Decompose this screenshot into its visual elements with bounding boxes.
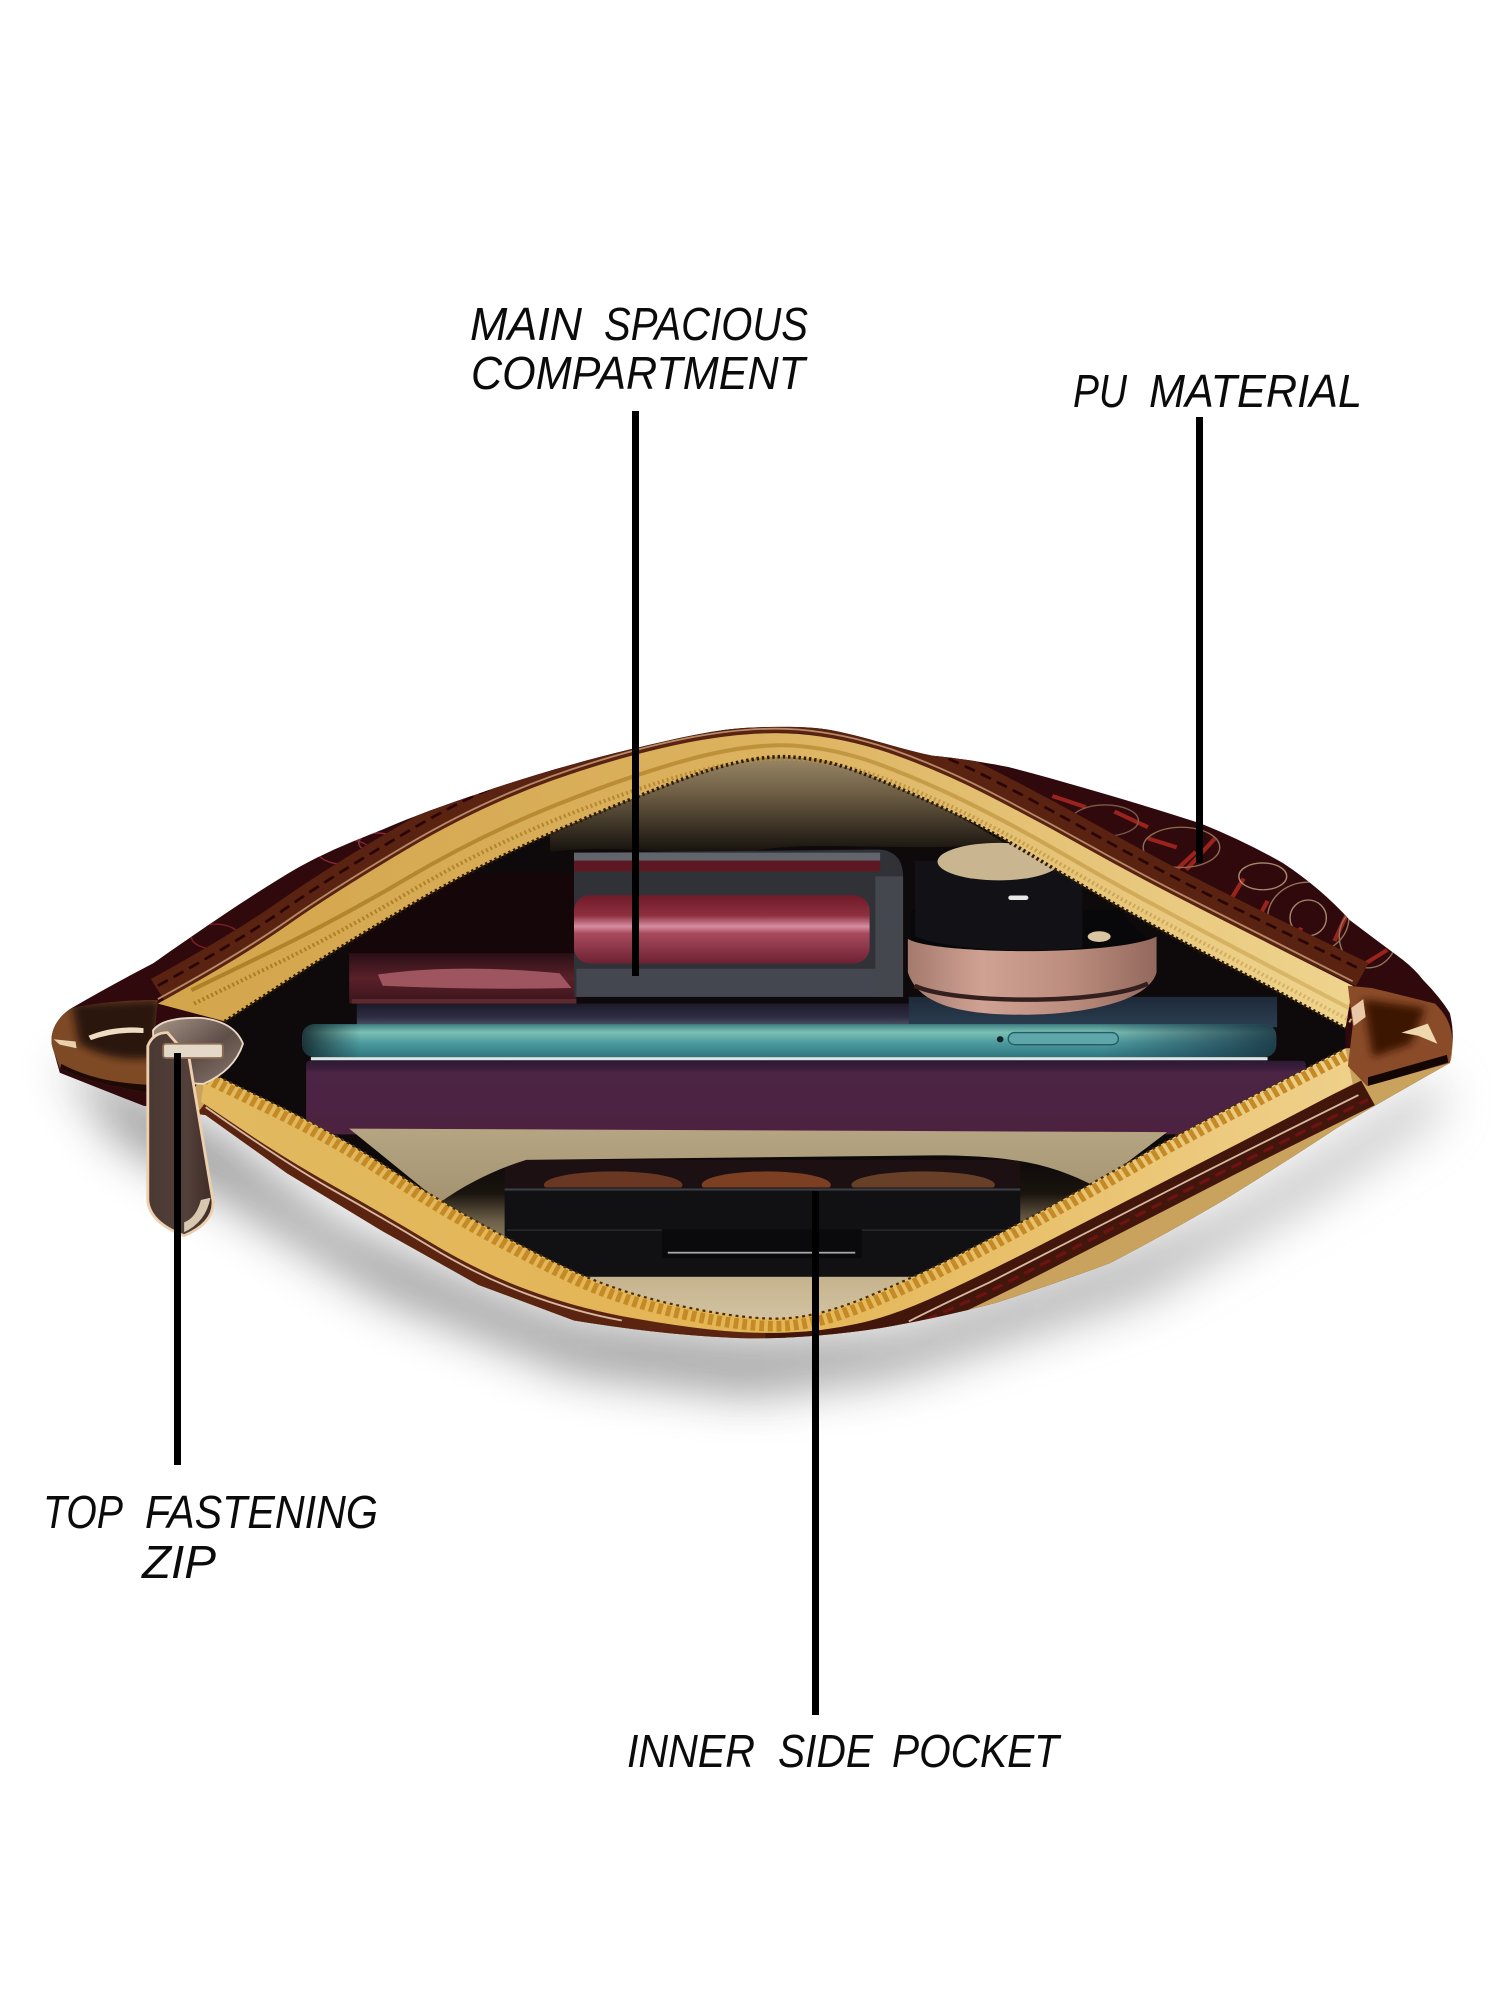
lip gloss, clear case xyxy=(574,850,903,997)
top zip centre seam xyxy=(191,745,1349,1008)
pigment mounds xyxy=(544,1171,683,1198)
leader line: top zip xyxy=(174,1053,181,1465)
tab dark zone xyxy=(1363,999,1425,1057)
label: inner side pocket: POCKET xyxy=(892,1725,1062,1777)
edge strip stitches, top xyxy=(157,756,1358,987)
tan lower panel xyxy=(191,1048,1464,1347)
pocket lining xyxy=(430,1160,1110,1329)
label: top fastening zip: ZIP xyxy=(141,1536,216,1588)
reflection xyxy=(378,969,572,989)
glossy edge strip, bottom right xyxy=(765,1093,1368,1345)
pull tab xyxy=(148,1033,213,1236)
tab left shine xyxy=(54,1039,77,1048)
side button xyxy=(1008,1033,1118,1045)
label: top fastening zip: FASTENING xyxy=(145,1486,378,1538)
pocket lip xyxy=(349,1129,1167,1202)
jar back xyxy=(911,910,1153,968)
palette lid xyxy=(505,1160,1020,1188)
clear body xyxy=(574,850,903,997)
clasp notch xyxy=(662,1229,862,1258)
body top edge xyxy=(505,1188,1020,1191)
back lining xyxy=(550,756,1004,852)
label: main spacious compartment: COMPARTMENT xyxy=(471,347,808,399)
base ring xyxy=(915,983,1148,1000)
powder flake xyxy=(1088,931,1111,942)
powder base xyxy=(908,937,1157,1015)
teal frame xyxy=(302,1024,1276,1057)
lid label xyxy=(938,843,1060,880)
phone xyxy=(302,997,1277,1060)
left rings xyxy=(318,839,371,864)
left bronze end tab xyxy=(48,997,163,1097)
lid highlight xyxy=(1008,896,1028,900)
camera dot xyxy=(997,1036,1004,1042)
label: PU material: PU xyxy=(1073,365,1128,417)
clasp highlight xyxy=(668,1252,855,1254)
slider head xyxy=(153,1018,243,1084)
tab body xyxy=(48,997,163,1097)
palette body xyxy=(505,1188,1020,1277)
makeup palette xyxy=(505,1160,1020,1277)
label: inner side pocket: INNER xyxy=(627,1725,755,1777)
right bronze end tab xyxy=(1344,981,1459,1091)
back plate right tone xyxy=(909,997,1277,1027)
top zip tape xyxy=(158,733,1353,1028)
bottom zip ribs xyxy=(206,1056,1346,1326)
top strip xyxy=(574,853,880,861)
lip gloss, dark case xyxy=(349,953,576,1004)
tab crease xyxy=(1351,999,1366,1026)
label: main spacious compartment: SPACIOUS xyxy=(604,298,808,350)
label: inner side pocket: SIDE xyxy=(778,1725,874,1777)
tab lower edge xyxy=(1368,1055,1448,1087)
top zip inner dotted row xyxy=(194,759,1352,1021)
tab shine xyxy=(88,1027,143,1040)
phone back plate xyxy=(357,1004,921,1026)
floral print linework xyxy=(191,796,1397,968)
edge strip highlight, bottom xyxy=(206,1095,1358,1321)
beige rings xyxy=(1290,900,1326,936)
top zip teeth xyxy=(225,757,1346,1028)
leader line: PU material xyxy=(1196,417,1203,863)
label: top fastening zip: TOP xyxy=(43,1486,123,1538)
slider ring xyxy=(163,1044,223,1058)
cosmetic jar xyxy=(908,843,1157,1015)
case upper body xyxy=(349,873,576,958)
tab body xyxy=(1344,981,1459,1091)
pouch interior xyxy=(206,745,1346,1327)
printed leather back panel xyxy=(29,713,1473,1347)
glass edge xyxy=(875,876,903,997)
red rays xyxy=(1052,796,1387,968)
glossy edge strip, bottom left xyxy=(201,1108,786,1340)
soft drop shadow xyxy=(62,1057,1439,1396)
glossy edge strip, top xyxy=(158,720,1362,990)
silver edge xyxy=(311,1057,1268,1060)
edge strip stitches, bottom xyxy=(894,1100,1368,1333)
body seam xyxy=(507,1229,1019,1231)
leader line: inner side pocket xyxy=(812,1191,819,1715)
leader line: main compartment xyxy=(632,411,639,976)
pouch contents xyxy=(302,745,1306,1329)
lower glass xyxy=(576,969,902,997)
pull tip shine xyxy=(184,1198,210,1232)
gloss tube xyxy=(574,895,870,963)
base line xyxy=(352,999,576,1004)
plum box xyxy=(306,1061,1306,1134)
open pouch illustration xyxy=(29,713,1473,1396)
case lower body xyxy=(349,953,576,1004)
tab dark upper shading xyxy=(72,1000,160,1059)
frame shading xyxy=(302,1024,1276,1057)
label: main spacious compartment: MAIN xyxy=(470,298,583,350)
edge strip highlight, top xyxy=(158,729,1353,999)
bottom zip teeth edge xyxy=(206,1048,1346,1319)
zip pull xyxy=(148,1018,243,1236)
black lid xyxy=(915,861,1082,950)
red top band xyxy=(574,861,880,871)
tab shine xyxy=(1401,1024,1437,1044)
bottom zip tape xyxy=(201,1048,1353,1333)
tab lower crease xyxy=(60,1064,149,1094)
label: PU material: MATERIAL xyxy=(1149,365,1362,417)
